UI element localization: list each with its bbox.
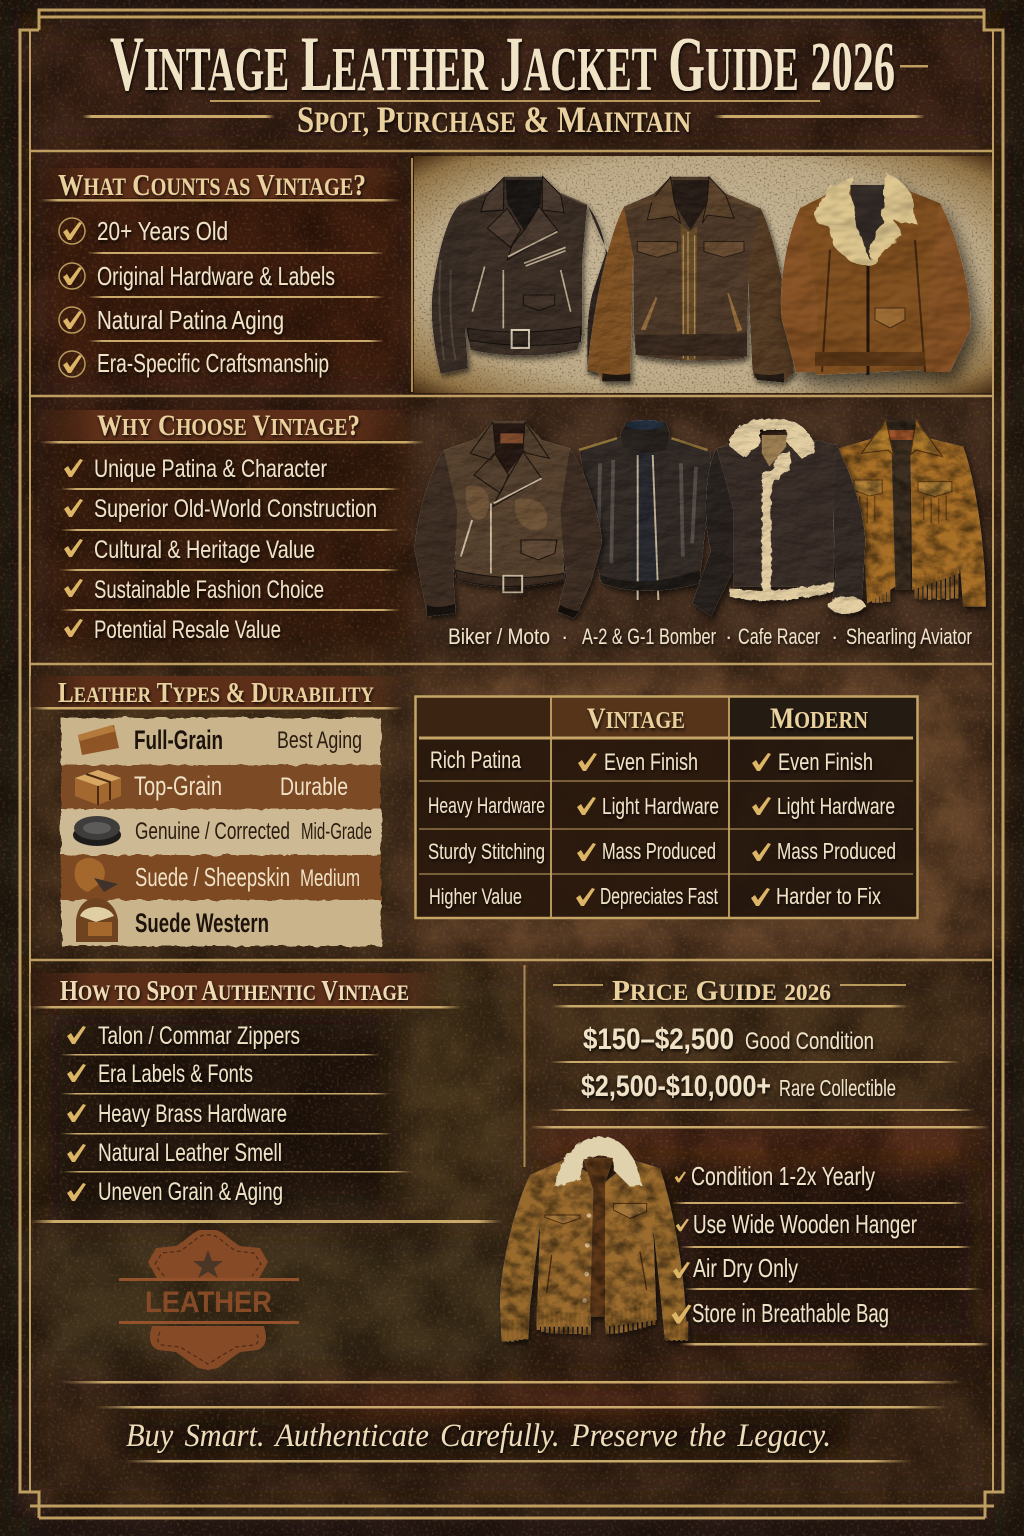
table header: MODERN — [770, 702, 869, 735]
jacket: shearling bomber — [692, 418, 865, 617]
table rows: Heavy Hardware — [428, 793, 545, 818]
checklist: vintage criteria: Natural Patina Aging — [97, 305, 284, 335]
panel: three jackets on parchment — [414, 156, 992, 393]
row labels: Mid-Grade — [301, 818, 372, 844]
row labels: Genuine / Corrected — [135, 818, 290, 845]
jacket: brown trucker — [587, 177, 794, 383]
captions: · — [561, 624, 568, 649]
table checks — [576, 753, 771, 906]
icon: suede sheepskin — [74, 858, 118, 892]
heading: leather types: LEATHER TYPES & DURABILITY — [58, 678, 374, 709]
tagline: Buy Smart. Authenticate Carefully. Preserve the Legacy. — [126, 1418, 831, 1454]
checklist: authenticity: Natural Leather Smell — [98, 1139, 282, 1167]
table rows: Even Finish — [604, 749, 698, 776]
captions: · — [831, 624, 838, 649]
checklist: reasons: Unique Patina & Character — [94, 455, 327, 483]
checklist: authenticity: Uneven Grain & Aging — [98, 1178, 283, 1206]
captions: Biker / Moto — [448, 624, 550, 649]
price rows: Rare Collectible — [779, 1075, 896, 1101]
checklist: reasons: Superior Old-World Construction — [94, 495, 377, 523]
jacket: suede western with fringe — [839, 420, 986, 607]
row labels: Best Aging — [277, 727, 362, 754]
captions — [448, 624, 972, 649]
divider — [411, 158, 413, 392]
panel: care list — [672, 1161, 990, 1346]
heading: what counts as vintage: WHAT COUNTS AS VINTAGE? — [58, 167, 366, 202]
panel: care list: Use Wide Wooden Hanger — [693, 1209, 917, 1239]
captions: · — [725, 624, 732, 649]
checklist: authenticity: Era Labels & Fonts — [98, 1060, 253, 1088]
panel: care list: Store in Breathable Bag — [692, 1298, 889, 1328]
price rows — [548, 1023, 974, 1111]
heading: price guide: PRICE GUIDE 2026 — [612, 975, 831, 1007]
heading: why choose vintage — [40, 409, 425, 444]
heading: how to spot: HOW TO SPOT AUTHENTIC VINTAGE — [60, 976, 409, 1007]
closing rules — [60, 1381, 963, 1462]
table rows: Rich Patina — [430, 747, 521, 774]
parchment rows — [61, 718, 381, 946]
title dash — [900, 65, 928, 68]
table rows: Sturdy Stitching — [428, 839, 545, 864]
checklist: reasons: Cultural & Heritage Value — [94, 536, 315, 564]
jacket: shearling collar — [781, 172, 970, 375]
table rows: Light Hardware — [777, 793, 895, 819]
panel: price guide — [530, 975, 990, 1128]
subtitle — [82, 100, 925, 141]
row labels: Suede / Sheepskin — [135, 862, 290, 892]
icon: suede western — [76, 898, 118, 942]
row labels: Durable — [280, 773, 348, 801]
jacket: suede fringe with shearling collar — [500, 1137, 687, 1342]
row labels: Full-Grain — [134, 725, 223, 755]
captions: Cafe Racer — [738, 624, 820, 649]
panel: how to spot authentic vintage — [30, 973, 502, 1223]
checklist: vintage criteria: Original Hardware & Labels — [97, 261, 335, 291]
heading: why choose vintage: WHY CHOOSE VINTAGE? — [97, 409, 360, 442]
price rows: $150–$2,500 — [583, 1023, 734, 1056]
table header: VINTAGE — [587, 702, 685, 735]
table rows: Light Hardware — [602, 793, 719, 819]
title: VINTAGE LEATHER JACKET GUIDE 2026 — [110, 20, 895, 107]
subtitle: SPOT, PURCHASE & MAINTAIN — [297, 100, 691, 141]
captions: A-2 & G-1 Bomber — [582, 624, 716, 649]
checklist: authenticity — [30, 1022, 502, 1223]
icon: genuine round — [73, 816, 121, 846]
table rows: Even Finish — [778, 749, 873, 776]
icon: leather badge: LEATHER — [145, 1286, 272, 1319]
checklist: reasons: Sustainable Fashion Choice — [94, 576, 324, 604]
divider — [524, 965, 526, 1167]
table rows — [428, 747, 896, 909]
table header — [587, 702, 869, 735]
checklist: vintage criteria — [59, 216, 384, 378]
table: vintage vs modern — [416, 696, 918, 918]
checklist: reasons: Potential Resale Value — [94, 616, 281, 644]
checklist: authenticity: Talon / Commar Zippers — [98, 1022, 300, 1050]
icon: leather badge — [119, 1230, 299, 1370]
icon: top-grain box — [75, 770, 121, 805]
price rows: $2,500-$10,000+ — [581, 1070, 771, 1103]
price rows: Good Condition — [745, 1028, 874, 1055]
captions: Shearling Aviator — [846, 624, 972, 649]
panel: why choose vintage — [40, 409, 425, 644]
checklist: vintage criteria: 20+ Years Old — [97, 216, 228, 246]
table rows: Harder to Fix — [776, 883, 881, 909]
row labels: Medium — [300, 865, 360, 892]
checklist: vintage criteria: Era-Specific Craftsmanship — [97, 348, 329, 378]
table rows: Higher Value — [429, 884, 522, 909]
icon: full-grain block — [78, 725, 119, 755]
row labels: Top-Grain — [134, 771, 222, 801]
jacket: cafe racer — [579, 420, 711, 600]
row labels: Suede Western — [135, 908, 269, 938]
panel: care list: Condition 1-2x Yearly — [691, 1161, 875, 1191]
jacket: black moto — [432, 176, 611, 374]
table rows: Mass Produced — [602, 838, 716, 864]
panel: what counts as vintage — [40, 167, 400, 378]
checklist: authenticity: Heavy Brass Hardware — [98, 1100, 287, 1128]
table rows: Depreciates Fast — [600, 883, 718, 909]
panel: care list: Air Dry Only — [693, 1253, 798, 1283]
jacket: biker moto — [415, 422, 602, 618]
panel: leather types — [30, 676, 403, 946]
panel: jacket styles — [415, 418, 986, 649]
checklist: reasons — [60, 455, 400, 644]
table rows: Mass Produced — [777, 838, 896, 864]
row labels — [134, 725, 372, 938]
